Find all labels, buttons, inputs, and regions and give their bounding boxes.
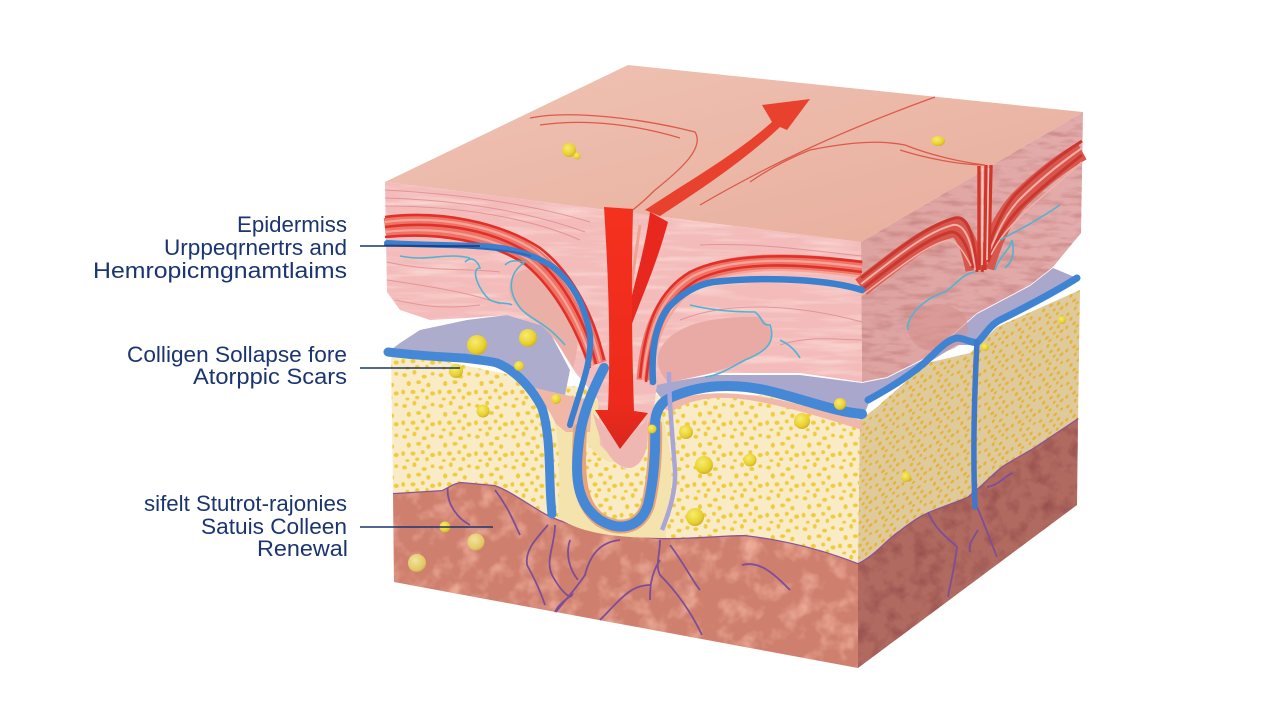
label: collagen renewal — [144, 491, 493, 561]
label: epidermis — [93, 212, 480, 283]
upper block: right face — [861, 112, 1083, 382]
label: collagen collapse: Atorppic Scars — [193, 364, 347, 389]
label: collagen collapse — [127, 342, 460, 389]
middle layer: yellow subcutaneous fat — [391, 290, 1080, 563]
blue-grey membrane band — [388, 268, 1077, 432]
red veins on top face — [530, 97, 985, 212]
right face red fibres — [861, 141, 1082, 296]
bottom layer: dermis block — [393, 418, 1078, 668]
blue basal membrane lines — [385, 243, 1077, 527]
collagen pocket: left — [509, 269, 578, 368]
purple side vessel — [662, 372, 675, 530]
arrow: red downward — [595, 207, 648, 449]
red collagen fibres — [385, 215, 862, 385]
label: collagen renewal: Renewal — [257, 536, 348, 561]
label: epidermis: Urppeqrnertrs and — [164, 235, 347, 260]
upper block: epidermis front face — [385, 182, 862, 470]
purple vein network — [393, 418, 1078, 635]
label: collagen renewal: sifelt Stutrot-rajonies — [144, 491, 347, 516]
collagen pocket: right — [658, 317, 771, 382]
fine pink tissue fibres — [385, 190, 862, 345]
label: collagen collapse: Colligen Sollapse fore — [127, 342, 347, 367]
pink tissue plug under arrow — [593, 413, 648, 468]
upper block: top face — [385, 65, 1083, 242]
red ribbon beside arrow — [626, 212, 668, 335]
cyan capillaries — [400, 205, 1060, 377]
yellow cells — [408, 136, 1066, 572]
label: epidermis: Epidermiss — [237, 212, 347, 237]
label: collagen renewal: Satuis Colleen — [201, 514, 347, 539]
arrow: red upward — [645, 99, 810, 216]
label: epidermis: Hemropicmgnamtlaims — [93, 258, 347, 283]
